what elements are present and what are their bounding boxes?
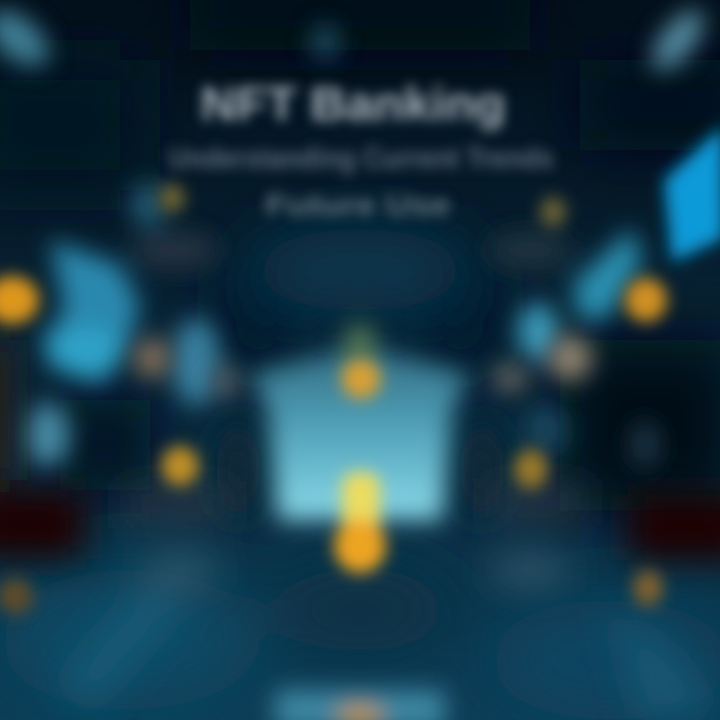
- right blue panels: [488, 228, 660, 469]
- gold coins: [0, 184, 667, 614]
- subtitle: Future Use: [266, 189, 450, 222]
- floor bands: [60, 490, 720, 720]
- central small coin: [341, 323, 381, 399]
- dark red side blocks: [0, 340, 720, 560]
- side dark figures beside light: [216, 420, 504, 520]
- tan accents: [134, 336, 592, 398]
- central gold coin stack: [334, 472, 386, 573]
- right bright blue panel: [664, 125, 720, 262]
- central light glow: [250, 345, 470, 520]
- subtitle: Understanding Current Trends: [168, 142, 554, 175]
- top corner panels: [0, 0, 713, 78]
- bottom reflection: [275, 690, 445, 720]
- title: NFT Banking: [200, 77, 505, 130]
- left blue panels: [25, 183, 220, 467]
- subtitle: [168, 142, 554, 222]
